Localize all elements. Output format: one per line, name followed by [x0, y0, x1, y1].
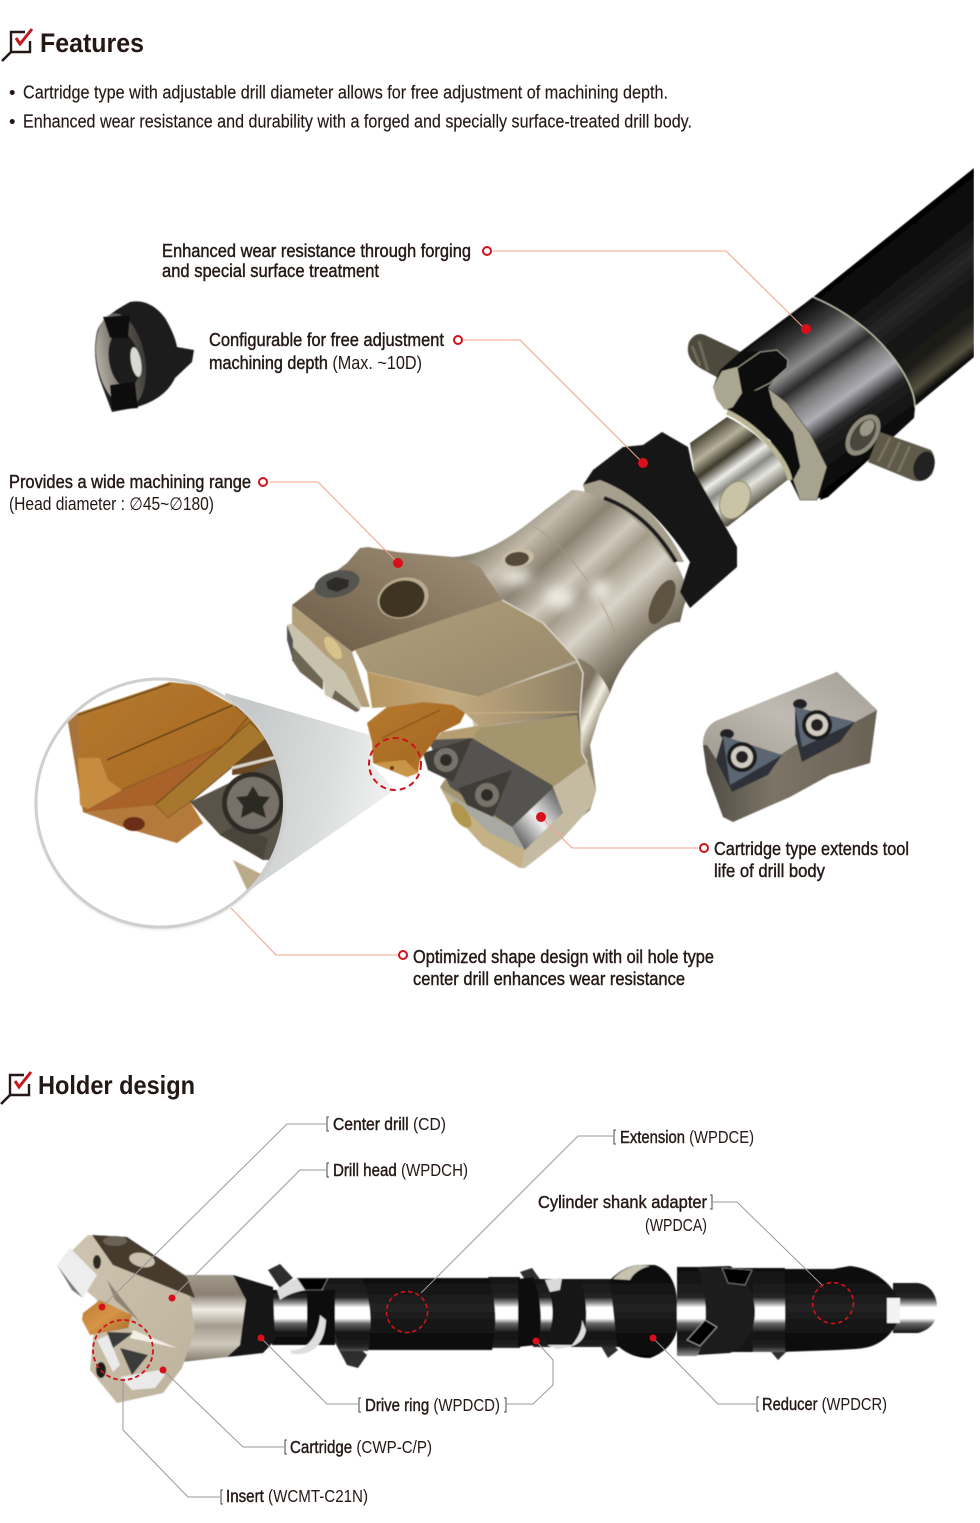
coolant hole [377, 577, 429, 620]
callout: optimized shape: center drill enhances wear resistance [413, 969, 685, 989]
leader: cartridge: Cartridge (CWP-C/P) [290, 1437, 432, 1457]
threaded hole [844, 414, 882, 456]
orange tip [82, 1300, 132, 1335]
leader: cartridge [160, 1366, 432, 1457]
callout: enhanced wear resistance [162, 241, 811, 334]
head top face [292, 547, 502, 652]
right gold lip [520, 762, 596, 868]
leader: insert [93, 1320, 368, 1506]
screw: upper [688, 334, 745, 380]
head dark top face [92, 1235, 195, 1298]
connecting shaft base [272, 1290, 335, 1345]
coolant hole [96, 1362, 106, 1378]
stem flare [577, 658, 610, 810]
head seams [367, 672, 578, 713]
rear black body [780, 1266, 897, 1352]
leader: drill head [168, 1160, 468, 1302]
middle disc [545, 1280, 586, 1345]
dark inserts [107, 1332, 148, 1375]
gold fill under tip [435, 725, 480, 740]
callout: enhanced wear resistance: and special surface treatment [162, 261, 379, 281]
head left side face [292, 605, 370, 707]
stem window [648, 580, 676, 624]
magnifier cone [225, 693, 395, 890]
head lower right face [472, 728, 481, 742]
callout: machining range: (Head diameter : ∅45~∅180) [9, 494, 214, 514]
lower gold edge [440, 787, 525, 868]
product: drive ring [89, 301, 194, 412]
drive ring: black [583, 432, 737, 608]
magnifier lens: center drill close-up [36, 679, 290, 929]
middle metal [533, 1279, 620, 1347]
cartridge grey plate [428, 738, 563, 850]
title text: Holder design [38, 1070, 195, 1100]
drive ring inner lip [583, 480, 684, 562]
callout: optimized shape [231, 908, 714, 989]
callout: configurable adjustment [209, 330, 648, 468]
icon: magnifier with check [2, 29, 32, 61]
disc: front crescent [768, 388, 827, 500]
cartridge body [703, 672, 877, 822]
text block: feature bullets: Cartridge type with adjustable drill diameter allows for free adjustment of machining depth. [23, 82, 668, 102]
tube: metallic band [745, 297, 915, 500]
head body [57, 1235, 195, 1403]
slot [737, 350, 788, 395]
reducer rear base [677, 1268, 785, 1352]
leader: reducer: Reducer (WPDCR) [762, 1394, 887, 1414]
cartridge top face [703, 672, 877, 770]
callout: optimized shape: Optimized shape design with oil hole type [413, 947, 714, 967]
head upper front face [355, 600, 577, 697]
screws [268, 1264, 788, 1368]
reducer [610, 1265, 677, 1358]
white sliver [130, 1330, 177, 1348]
left inserts [287, 622, 362, 712]
shank end [893, 1283, 937, 1333]
leader: cylinder shank adapter: Cylinder shank adapter [538, 1192, 707, 1212]
disc: back crescent [713, 367, 742, 410]
extension body [320, 1278, 496, 1350]
leader: cylinder shank adapter: (WPDCA) [645, 1215, 707, 1235]
screw: lower [868, 432, 939, 484]
key slot [718, 480, 752, 520]
red dashed focus circle [369, 738, 421, 790]
head middle face [367, 663, 582, 727]
bottom silver inserts [97, 1335, 165, 1390]
text block: feature bullets: • [9, 82, 15, 102]
reducer slot [687, 1320, 717, 1346]
heading: Features [2, 28, 144, 61]
drive ring gap [604, 498, 676, 562]
callout: machining range: Provides a wide machining range [9, 472, 251, 492]
leader: extension [386, 1127, 754, 1332]
disc cutaway [277, 1278, 310, 1300]
callout: configurable adjustment: Configurable for free adjustment [209, 330, 444, 350]
head lower face shade [107, 1280, 140, 1322]
drive ring [227, 1275, 275, 1357]
leader: reducer [650, 1334, 887, 1414]
callout: enhanced wear resistance: Enhanced wear resistance through forging [162, 241, 471, 261]
leader: drive ring: Drive ring (WPDCD) [365, 1395, 500, 1415]
leader: drive ring [258, 1334, 553, 1415]
illustration: exploded drill body [287, 168, 974, 868]
left inserts [57, 1248, 97, 1298]
insert A [716, 729, 782, 792]
lens: brown backing [232, 700, 290, 775]
side hole [324, 636, 342, 660]
rear white band [887, 1298, 900, 1323]
callout: machining range [9, 472, 403, 568]
heading: Holder design [1, 1070, 195, 1104]
disc underlay [712, 300, 824, 499]
dark interior [734, 390, 799, 474]
hex screw [314, 570, 360, 598]
text block: feature bullets: • [9, 110, 15, 132]
reducer upper slot [722, 1268, 752, 1285]
leader: insert: Insert (WCMT-C21N) [226, 1486, 368, 1506]
lens: carbide insert [190, 760, 290, 860]
shaft seal ring [727, 412, 790, 480]
lens: orange tip [68, 682, 267, 843]
leader: drill head: Drill head (WPDCH) [333, 1160, 468, 1180]
lens: sliver below [233, 860, 263, 892]
lower gold body [440, 721, 528, 866]
tube: black shank [812, 168, 974, 407]
orange center drill [367, 702, 465, 777]
cartridge silver strip [512, 788, 563, 850]
head side screw [103, 1236, 127, 1246]
head side hole [93, 1255, 101, 1269]
stem seam [533, 526, 618, 640]
insert 1 [423, 738, 472, 782]
stem collar [453, 490, 686, 816]
reducer rear segments [697, 1266, 755, 1355]
stem highlights [498, 569, 611, 609]
text block: feature bullets [9, 82, 692, 132]
insert 2 [458, 770, 512, 817]
icon: magnifier with check [1, 1072, 31, 1104]
head rim [502, 600, 587, 762]
callout: cartridge type [536, 812, 909, 881]
callout: cartridge type: life of drill body [714, 861, 825, 881]
leader: center drill [98, 1114, 446, 1310]
leader: cylinder shank adapter [538, 1192, 854, 1324]
rear metal ring [753, 1268, 785, 1352]
connecting shaft [272, 1293, 307, 1337]
callout: cartridge type: Cartridge type extends tool [714, 839, 909, 859]
head top hole [128, 1250, 156, 1270]
leader: extension: Extension (WPDCE) [620, 1127, 754, 1147]
text block: feature bullets: Enhanced wear resistance and durability with a forged and specially surface-treated drill body. [23, 110, 692, 132]
title text: Features [40, 28, 144, 58]
stem hole [502, 550, 534, 567]
leader: center drill: Center drill (CD) [333, 1114, 446, 1134]
illustration: assembled holder [57, 1235, 937, 1403]
stem [182, 1275, 255, 1362]
insert B [793, 699, 855, 762]
shaft [690, 417, 790, 527]
callout: configurable adjustment: machining depth (Max. ~10D) [209, 353, 422, 373]
product: cartridge with two inserts [703, 672, 877, 822]
